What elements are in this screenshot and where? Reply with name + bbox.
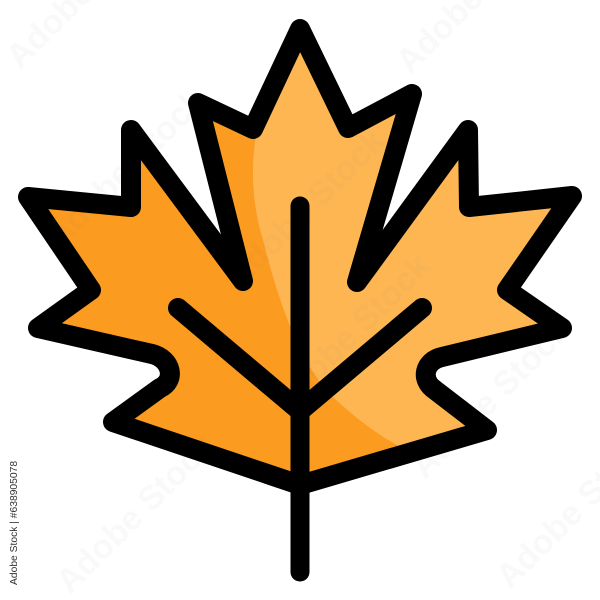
watermark: Adobe Stock — [49, 427, 223, 600]
side veins — [178, 308, 422, 411]
watermark: Adobe Stock — [219, 122, 393, 296]
leaf outline — [28, 29, 572, 485]
stem and midrib — [290, 206, 310, 572]
stock id text: Adobe Stock | #638905078 — [9, 461, 20, 585]
watermark: Adobe Stock — [404, 312, 578, 486]
watermark: Adobe Stock — [264, 247, 438, 421]
leaf highlight — [253, 52, 551, 446]
leaf fill — [48, 52, 552, 472]
watermark: Adobe Stock — [39, 82, 213, 256]
